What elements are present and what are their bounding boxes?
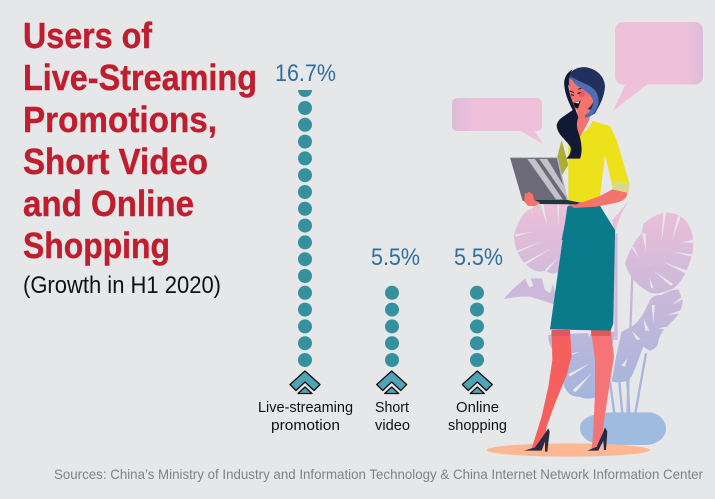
- shirt: [568, 121, 629, 203]
- subtitle: (Growth in H1 2020): [23, 272, 221, 299]
- title: [23, 15, 257, 266]
- category labels: video: [375, 418, 410, 434]
- icon: chevron live-streaming: [290, 371, 320, 394]
- leaf lower left: [548, 332, 615, 399]
- category labels: Short: [375, 400, 409, 416]
- hand: [524, 192, 540, 206]
- title: Promotions,: [23, 99, 217, 140]
- left sleeve: [557, 140, 568, 176]
- dark hair: [557, 69, 582, 159]
- category labels: Online: [456, 400, 499, 416]
- title: Shopping: [23, 225, 170, 266]
- skirt: [550, 207, 615, 331]
- legs and shoes: [524, 330, 614, 452]
- leaf top right: [625, 213, 693, 293]
- icon: chevron online shopping: [462, 371, 492, 394]
- value labels: 5.5%: [371, 244, 420, 271]
- head and hair: [557, 67, 605, 159]
- leaf middle right: [612, 289, 683, 382]
- pot: [580, 412, 666, 445]
- title: Short Video: [23, 141, 208, 182]
- value labels: [275, 60, 503, 271]
- woman figure: [510, 67, 629, 452]
- laptop base: [535, 200, 580, 204]
- blue hair streak: [570, 76, 599, 118]
- title: Users of: [23, 15, 153, 56]
- speech bubble large: [613, 22, 703, 111]
- neck and chest: [573, 107, 592, 137]
- cuff: [612, 181, 629, 193]
- stems: [610, 200, 646, 413]
- back hair: [565, 67, 605, 117]
- laptop: [510, 158, 567, 201]
- icon: chevron short video: [377, 371, 407, 394]
- category labels: promotion: [271, 418, 340, 434]
- speech bubble small: [452, 98, 543, 144]
- eyes and mouth: [569, 87, 584, 95]
- value labels: 5.5%: [454, 244, 503, 271]
- category labels: Live-streaming: [258, 400, 353, 416]
- title: and Online: [23, 183, 194, 224]
- arm: [566, 189, 627, 208]
- title: Live-Streaming: [23, 57, 257, 98]
- plants and pot: [487, 200, 694, 457]
- leaf top left: [514, 200, 570, 274]
- upper body: [510, 121, 629, 240]
- skirt top: [562, 206, 615, 240]
- dot column: short video: [385, 286, 399, 367]
- value labels: 16.7%: [275, 60, 336, 87]
- category labels: shopping: [448, 418, 507, 434]
- floor shadow: [487, 443, 650, 457]
- face: [569, 77, 594, 111]
- dot column: live-streaming promotion: [298, 90, 312, 367]
- leaf left spiky: [504, 278, 557, 305]
- dot column: online shopping: [470, 286, 484, 367]
- category labels: [258, 400, 507, 434]
